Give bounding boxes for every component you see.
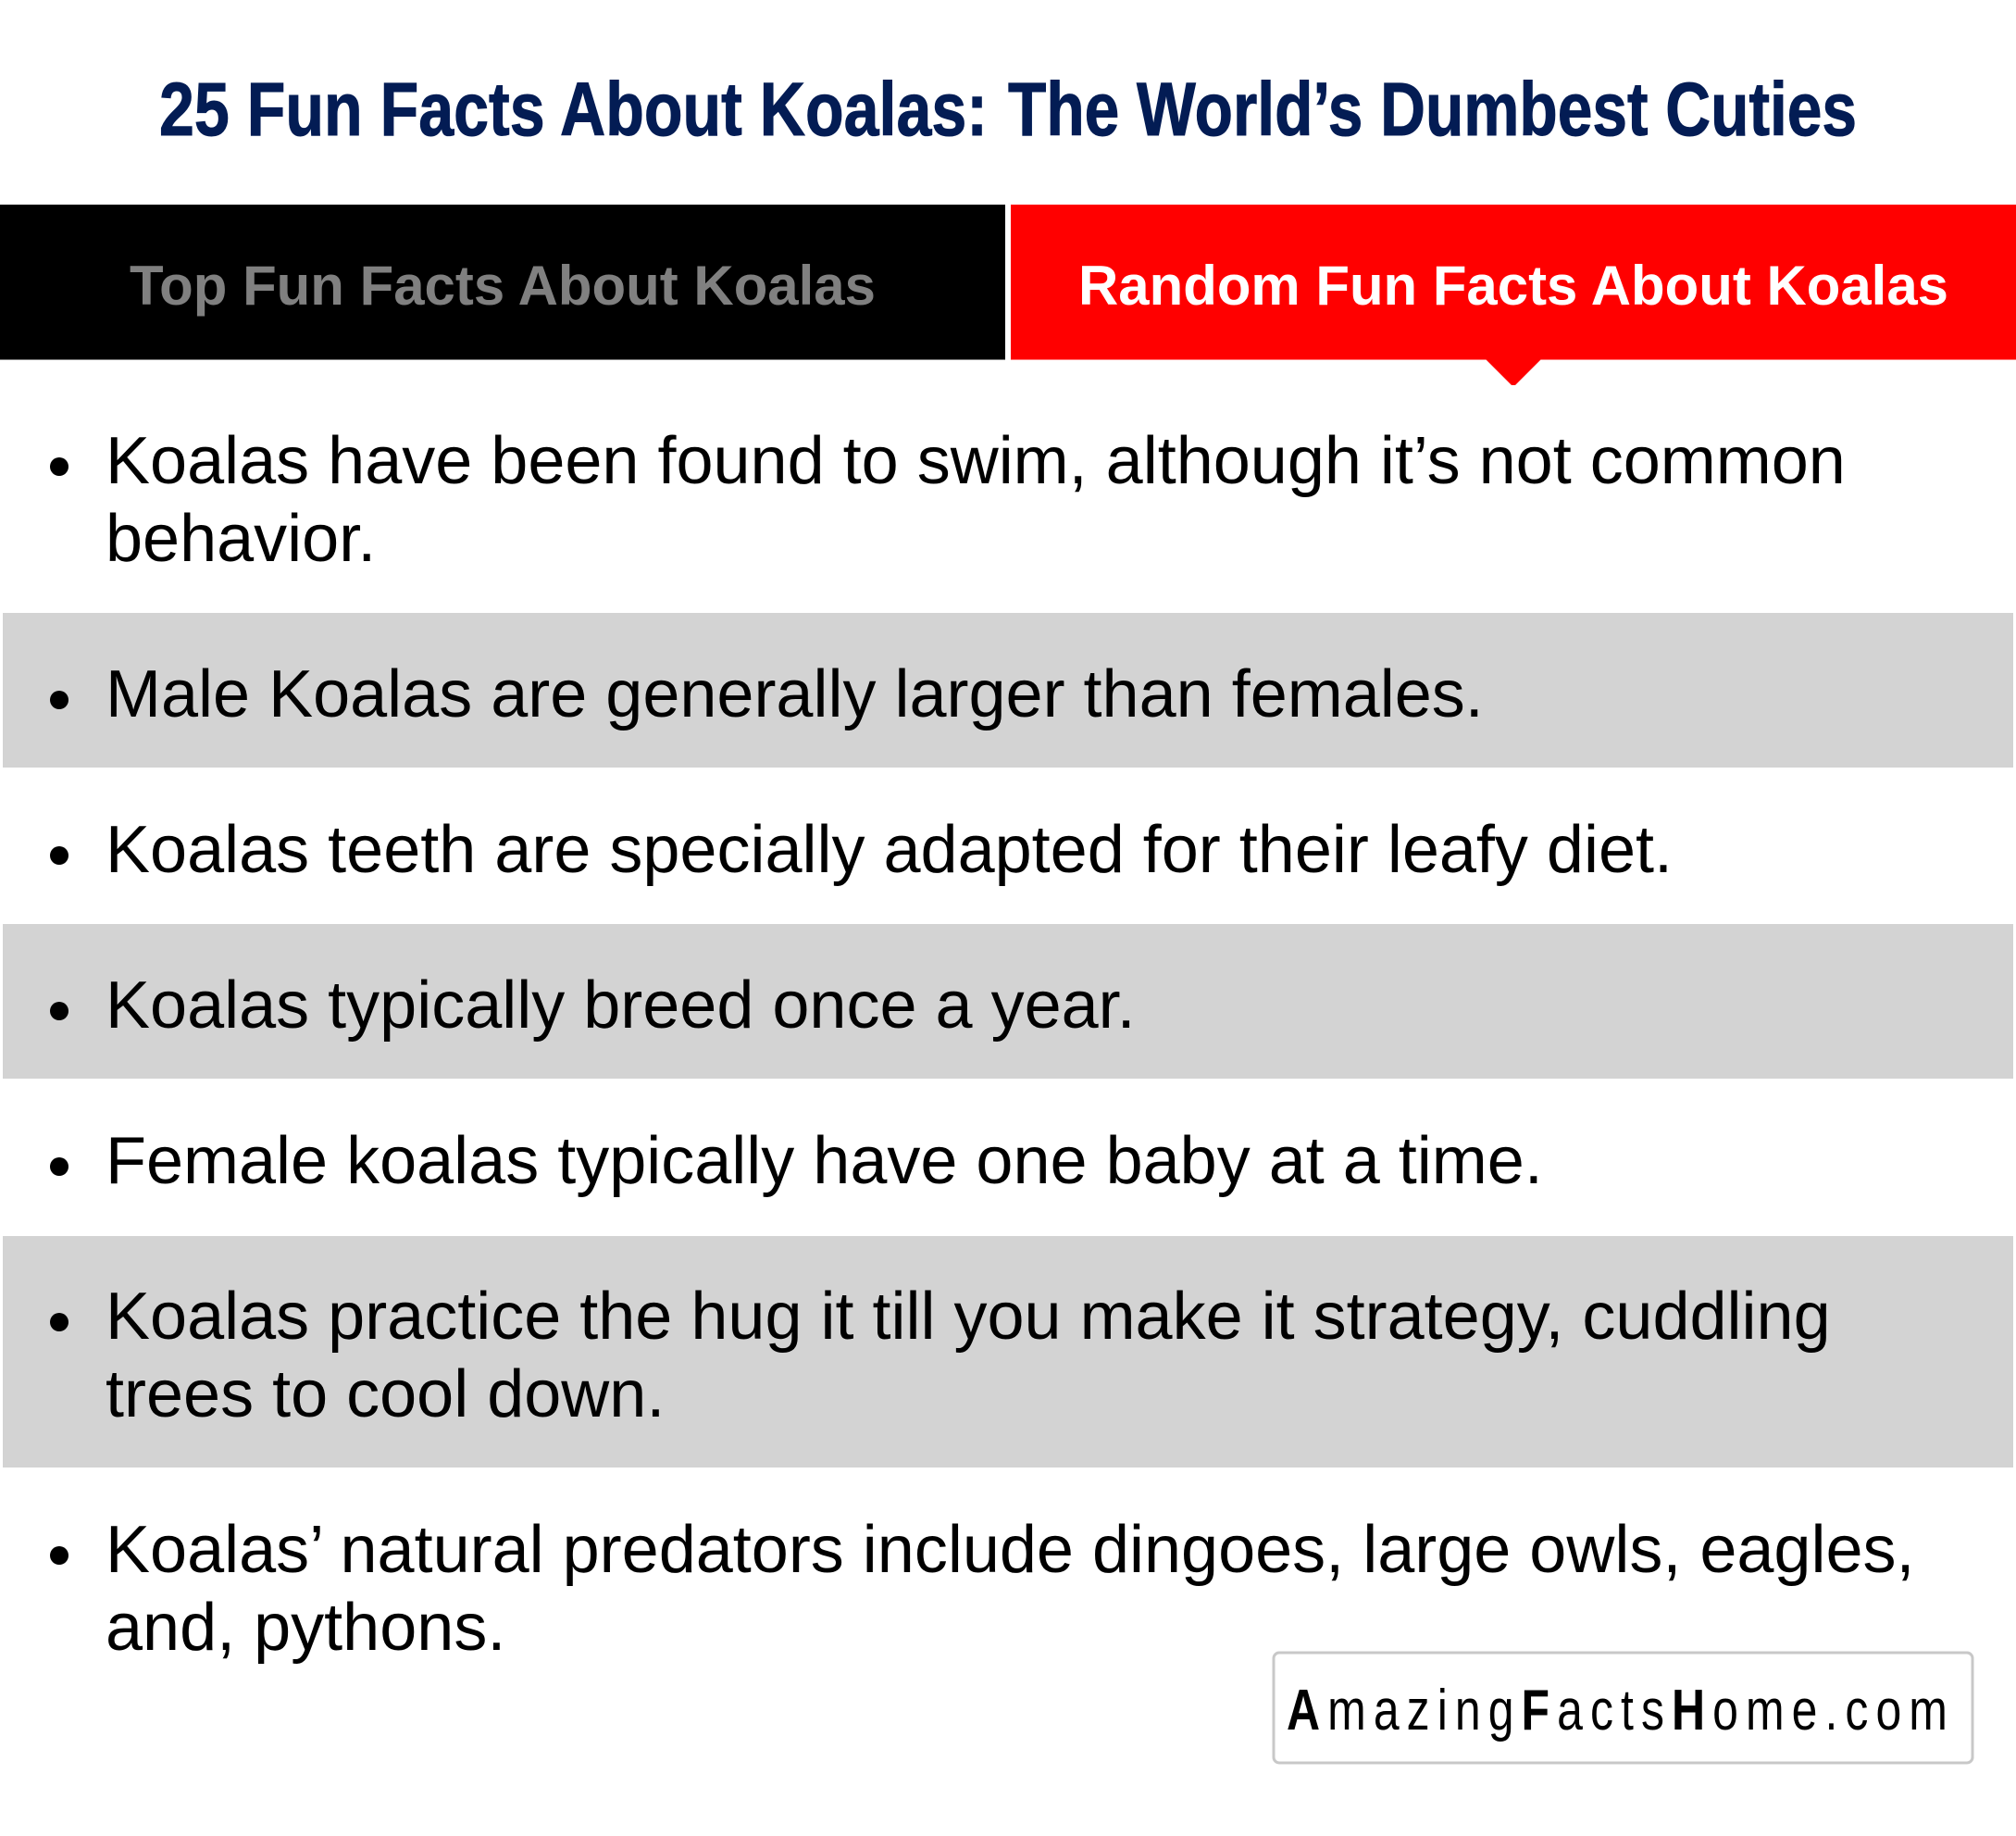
row 2 (3, 613, 2013, 768)
row 1 (50, 424, 1846, 576)
row 2: Male Koalas are generally larger than females. (106, 657, 1484, 731)
watermark: AmazingFactsHome.com (1287, 1679, 1955, 1742)
row 1: behavior. (106, 502, 376, 576)
title (159, 68, 1857, 152)
row 4 (3, 924, 2013, 1079)
row 6: trees to cool down. (106, 1357, 665, 1431)
watermark (1274, 1653, 1972, 1763)
tab: top fun facts: Top Fun Facts About Koalas (130, 255, 876, 317)
title: 25 Fun Facts About Koalas: (159, 68, 988, 152)
tab: random fun facts (1011, 205, 2016, 385)
tab: top fun facts (0, 205, 1005, 359)
title: The World’s Dumbest Cuties (1008, 68, 1857, 152)
row 3: Koalas teeth are specially adapted for their leafy diet. (106, 813, 1673, 887)
row 1: Koalas have been found to swim, although it’s not common (106, 424, 1846, 498)
row 6 (3, 1236, 2013, 1468)
row 7: and, pythons. (106, 1591, 505, 1665)
row 7: Koalas’ natural predators include dingoes, large owls, eagles, (106, 1513, 1915, 1587)
row 6: Koalas practice the hug it till you make it strategy, cuddling (106, 1280, 1831, 1354)
tab: random fun facts: Random Fun Facts About Koalas (1078, 255, 1948, 317)
row 4: Koalas typically breed once a year. (106, 968, 1136, 1043)
row 5: Female koalas typically have one baby at a time. (106, 1124, 1543, 1198)
row 7 (50, 1513, 1915, 1665)
